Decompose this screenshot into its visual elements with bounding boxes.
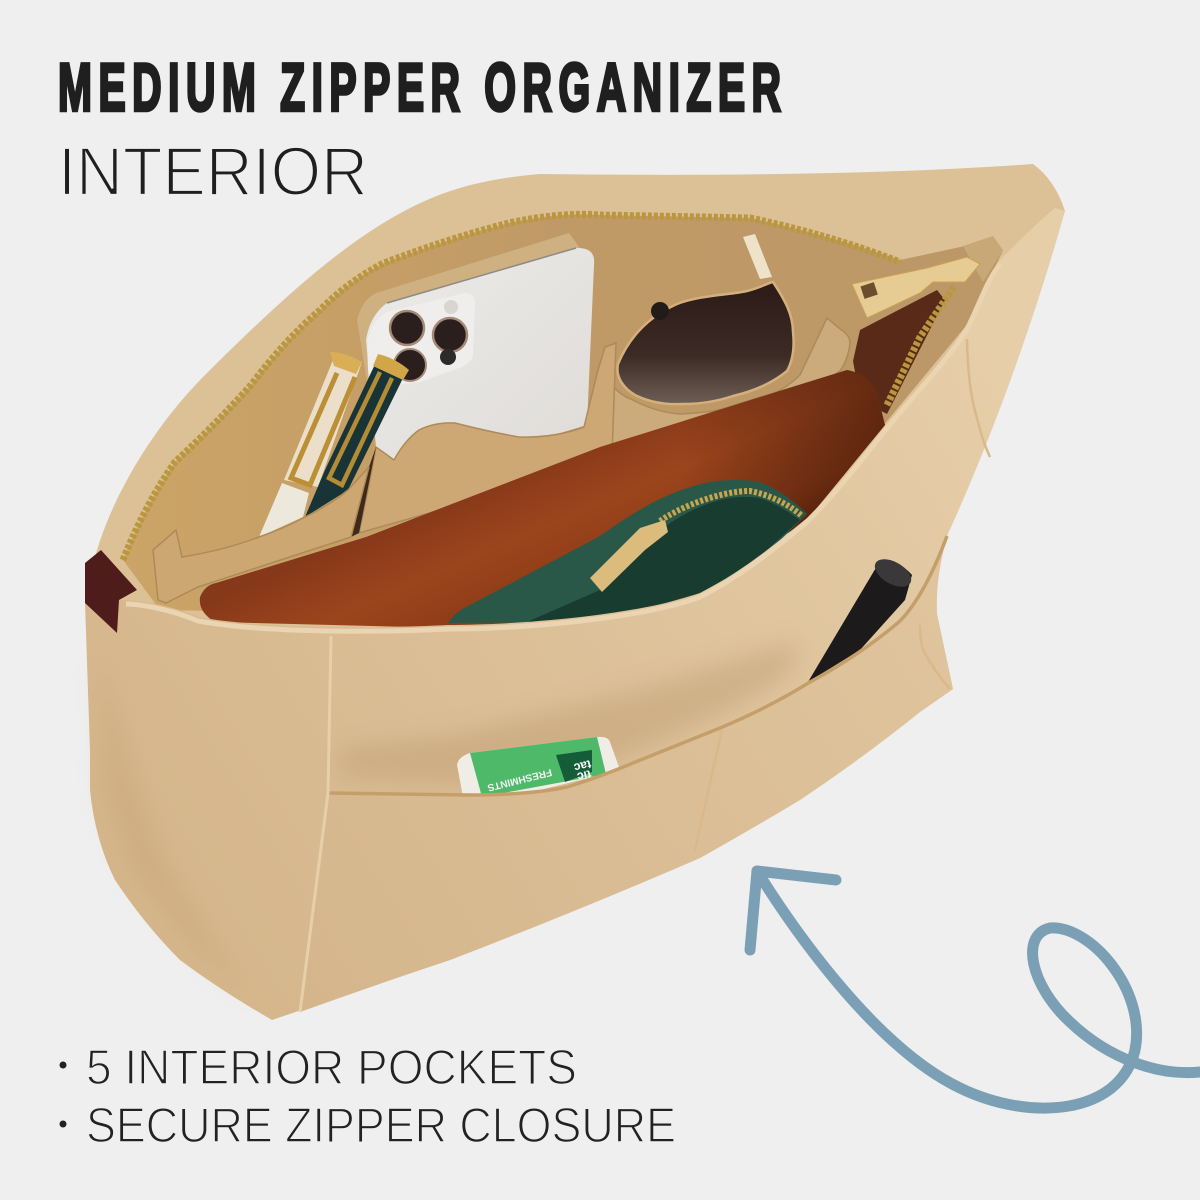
tic tac logo (556, 750, 592, 782)
tic tac box (457, 737, 620, 800)
lenses (390, 311, 424, 345)
sunglasses (617, 234, 794, 404)
left vertical seam (300, 636, 331, 1012)
tic tac brand second line: tic (575, 767, 593, 784)
pocket: right interior (607, 318, 850, 458)
right seams (695, 339, 990, 850)
main zipper (123, 214, 955, 560)
subtitle: INTERIOR (58, 133, 368, 210)
phone edge highlight (387, 248, 576, 303)
dark gap at right (853, 290, 945, 414)
green leather pouch (448, 480, 807, 625)
bullet two: SECURE ZIPPER CLOSURE (86, 1099, 676, 1153)
zipper end tab (963, 236, 1003, 282)
title: MEDIUM ZIPPER ORGANIZER (58, 49, 781, 125)
dark gap between pockets (351, 447, 376, 537)
organizer bag illustration (85, 164, 1065, 1020)
pen cream and gold (284, 352, 362, 487)
feature list (60, 1041, 676, 1153)
pouch zipper (660, 491, 802, 521)
pocket: left interior (153, 467, 369, 603)
front panel (85, 208, 1065, 1020)
pouch zipper pull (590, 520, 668, 592)
tic tac brand: tac (572, 757, 593, 775)
maroon leather tab (85, 550, 137, 633)
bullet dot two (60, 1120, 66, 1128)
outer pocket edge (328, 536, 947, 795)
rim highlight (126, 264, 1000, 631)
outer pocket (300, 536, 953, 1012)
marker pen shadow (800, 560, 925, 690)
pen clip (329, 372, 392, 485)
back panel of bag (91, 164, 1065, 640)
pen clip (291, 373, 355, 485)
bullet dot one (60, 1062, 66, 1068)
leather roll (200, 370, 885, 628)
main zipper pull (852, 257, 980, 318)
marker pen in outer pocket (808, 553, 916, 682)
curly blue arrow (750, 871, 1200, 1108)
smartphone (366, 248, 594, 462)
tic tac descriptor: FRESHMINTS (486, 766, 553, 793)
notebook under pens (259, 483, 309, 537)
pocket: centre interior (359, 343, 616, 533)
left side shading (100, 650, 255, 1000)
camera module (368, 293, 475, 400)
interior lining (123, 214, 1003, 620)
phone pocket band (357, 233, 590, 400)
upper pocket shade (340, 640, 800, 785)
pen dark green and gold (305, 354, 409, 517)
bullet one: 5 INTERIOR POCKETS (86, 1041, 577, 1095)
